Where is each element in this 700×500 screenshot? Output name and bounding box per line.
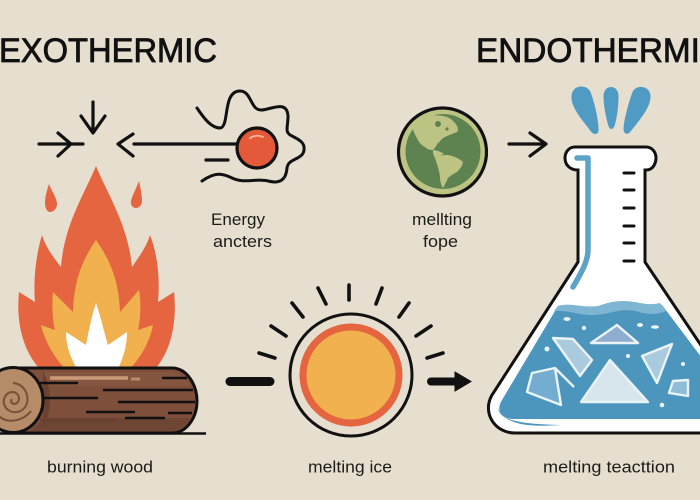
icon: flame	[18, 166, 175, 369]
icon: sun	[259, 285, 443, 436]
label: energy anters: ancters	[213, 232, 272, 251]
label: melting fope: fope	[423, 232, 458, 251]
icon: log	[0, 368, 197, 433]
icon: energy particle	[197, 91, 304, 182]
label: melting teacttion: melting teacttion	[543, 458, 675, 476]
arrow: globe to flask	[509, 133, 546, 156]
label: energy anters	[211, 210, 272, 251]
glass stripe	[573, 158, 588, 287]
title: exothermic: EXOTHERMIC	[0, 32, 217, 70]
label: burning wood: burning wood	[47, 458, 153, 476]
label: melting fope	[412, 210, 472, 251]
icon: globe	[398, 108, 486, 196]
scale ticks	[624, 173, 634, 261]
liquid	[499, 305, 700, 419]
label: melting ice: melting ice	[308, 458, 392, 476]
bubbles	[544, 317, 685, 407]
arrow: right bold	[430, 372, 471, 391]
icon: left bar	[230, 377, 270, 386]
ice shards	[527, 325, 688, 405]
label: energy anters: Energy	[211, 210, 265, 229]
icon: blue droplets	[571, 87, 651, 134]
icon: flask	[488, 147, 700, 433]
icon: inward arrows	[39, 102, 237, 156]
ground line	[0, 432, 206, 435]
icon: flame droplets	[45, 181, 142, 212]
label: melting fope: mellting	[412, 210, 472, 229]
